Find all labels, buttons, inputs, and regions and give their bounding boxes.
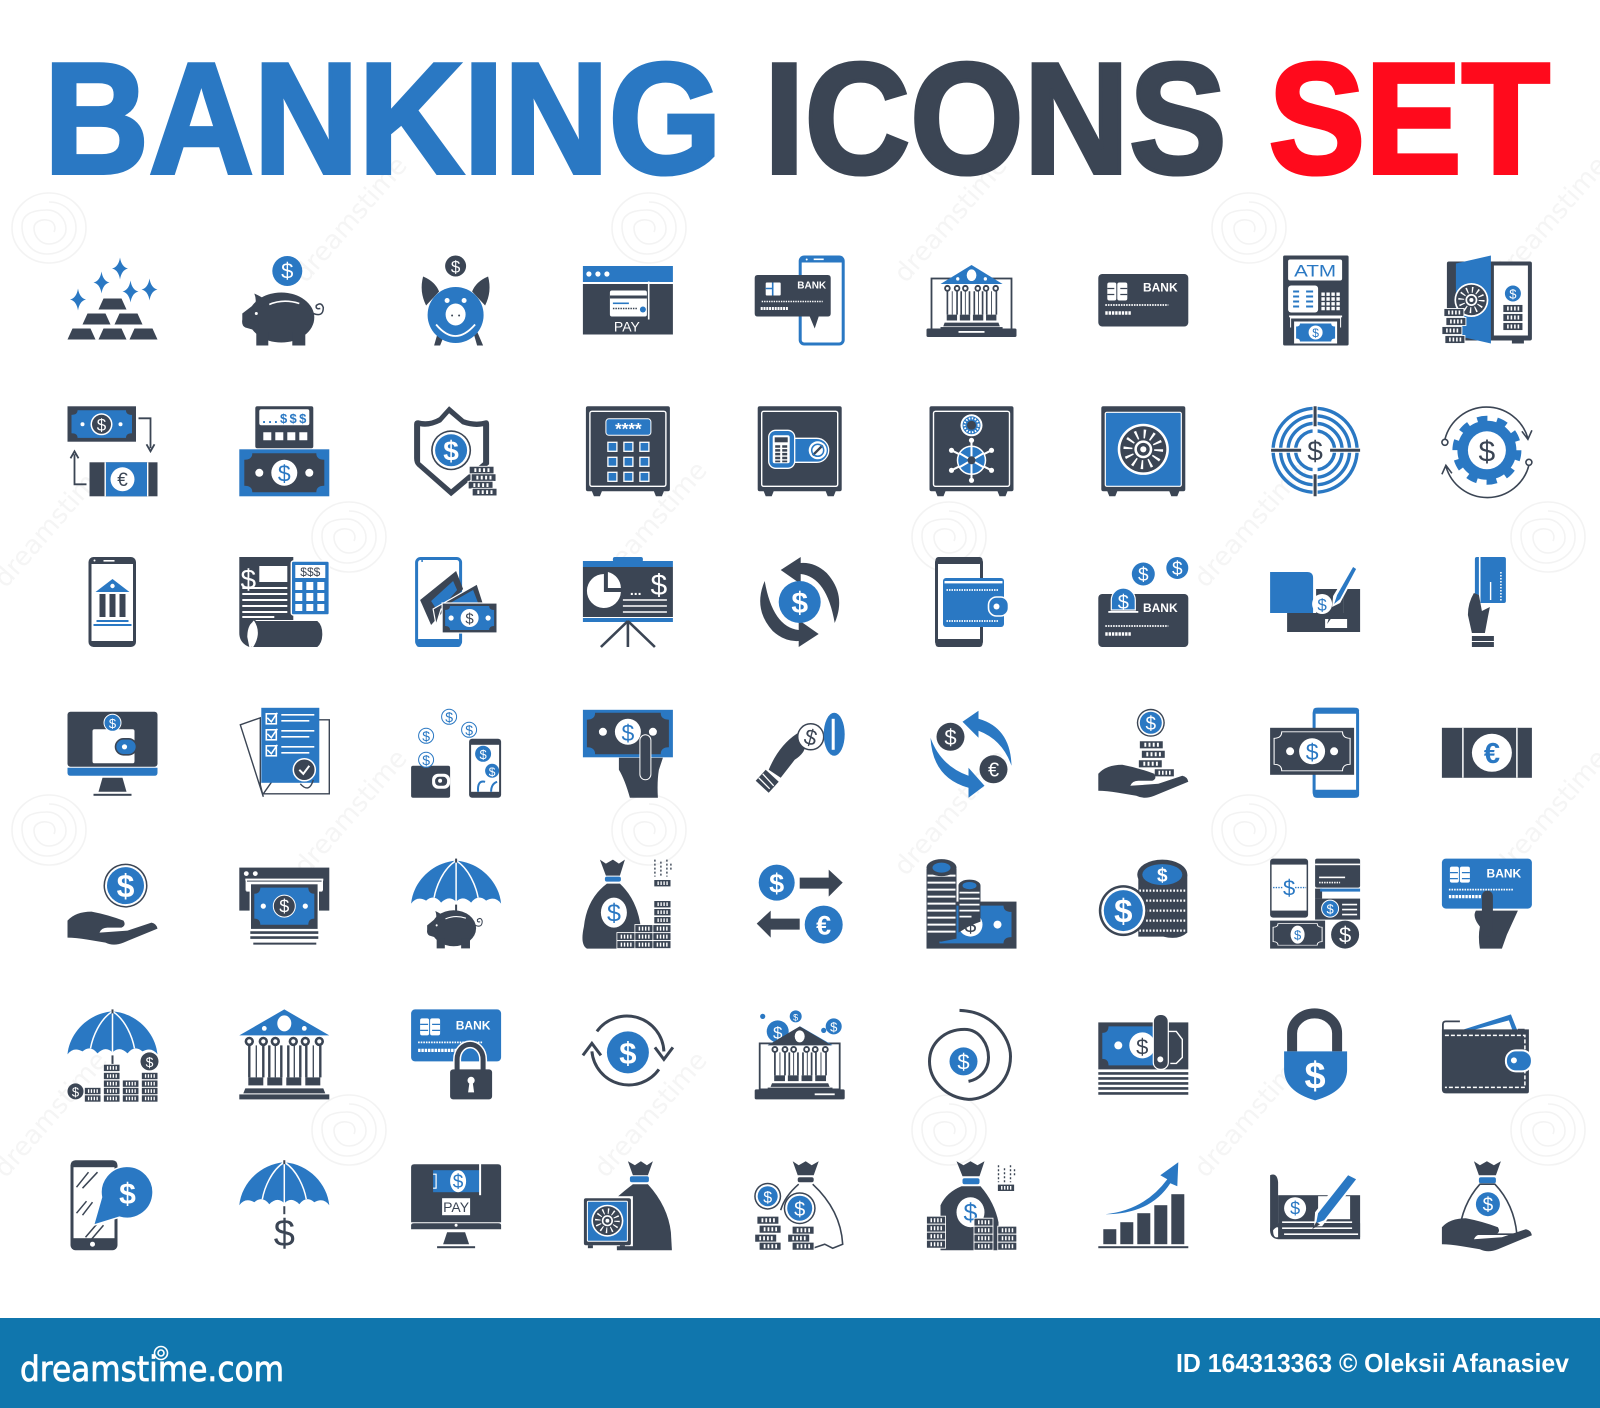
icon: bank chat on phone — [755, 256, 843, 344]
footer logo text: dreamstime.com — [20, 1350, 284, 1390]
icon: big coin and stack — [1099, 860, 1187, 938]
icon: bank card with coins: $ — [1118, 592, 1129, 614]
icon: currency exchange arrows: € — [988, 759, 999, 781]
icon: coin with arrows — [583, 1016, 673, 1085]
icon: coin stacks on banknote — [926, 859, 1016, 949]
icon: spiral coin: $ — [957, 1049, 970, 1074]
icon: presentation board: $ — [651, 569, 668, 602]
icon: money bag with stacks — [582, 860, 671, 949]
icon: bank card with coins: BANK — [1143, 601, 1178, 615]
icon: umbrella dollar: $ — [274, 1213, 295, 1255]
icon: hand inserting coin — [756, 713, 845, 793]
icon: ATM: ATM — [1294, 262, 1336, 280]
icon: wallet, phone and coins: $ — [445, 709, 453, 725]
icon: bank card with finger: BANK — [1487, 867, 1522, 881]
icon: monitor pay — [411, 1163, 501, 1248]
watermark: dreamstime — [288, 744, 414, 882]
icon: money counter — [239, 406, 329, 496]
icon: umbrella over piggy bank — [411, 859, 501, 948]
icon: banknote on phone — [1270, 708, 1359, 798]
icon: cash dispenser — [239, 868, 329, 944]
watermark: dreamstime — [288, 151, 414, 289]
icon: monitor pay: $ — [453, 1172, 464, 1193]
icon: coin with circular arrows: $ — [791, 587, 808, 620]
icon: bank chat on phone: BANK — [797, 280, 827, 292]
icon: mobile, card and cash: $ — [1283, 876, 1295, 901]
title — [44, 31, 1550, 207]
watermark: dreamstime — [1188, 1046, 1314, 1184]
icon: shield with coin: $ — [443, 435, 459, 466]
icon: mobile, card and cash — [1270, 859, 1360, 949]
icon: browser pay: PAY — [614, 318, 641, 334]
icon: bank card: BANK — [1143, 280, 1178, 294]
footer image credit: ID 164313363 © Oleksii Afanasiev — [1176, 1348, 1570, 1378]
icon: phone with banknotes — [416, 558, 497, 647]
icon: blue document, check and pen — [1270, 563, 1360, 632]
icon: hand holding coin stack: $ — [1146, 714, 1157, 735]
icon: money counter: ...$$$ — [262, 411, 307, 426]
icon: safe with keypad — [586, 406, 670, 496]
icon: coins with outlined bag — [754, 1161, 843, 1250]
icon: bank card with padlock — [411, 1009, 501, 1099]
icon: document with calculator: $ — [241, 564, 257, 595]
icon: bank card with coins: $ — [1172, 559, 1183, 580]
icon: banknote on phone: $ — [1306, 739, 1319, 765]
icon: wallet, phone and coins — [411, 709, 501, 798]
icon: dollar euro exchange — [757, 865, 843, 944]
icon: padlock with dollar: $ — [1305, 1055, 1326, 1097]
icon: coin stacks on banknote: $ — [965, 915, 977, 938]
icon: bank on phone — [88, 557, 136, 647]
watermark: dreamstime — [1188, 456, 1314, 594]
title: ICONS — [764, 31, 1227, 207]
watermark: dreamstime — [588, 1046, 714, 1184]
icon: umbrella over coin stacks: $ — [146, 1054, 154, 1070]
icon: wallet, phone and coins: $ — [479, 747, 487, 762]
watermark: dreamstime — [888, 744, 1014, 882]
icon: bank card with padlock: BANK — [456, 1018, 491, 1032]
icon: wallet, phone and coins: $ — [422, 728, 430, 744]
icon: open safe with coins: $ — [1509, 286, 1517, 302]
icon: bank on laptop — [926, 265, 1016, 337]
icon: coins with outlined bag: $ — [794, 1199, 805, 1221]
icon: mobile, card and cash: $ — [1294, 928, 1302, 943]
icon: coin with arrows: $ — [619, 1035, 637, 1070]
footer logo swirl — [154, 1346, 168, 1360]
icon: hand holding banknote: $ — [622, 720, 635, 746]
icon: wallet, phone and coins: $ — [465, 722, 473, 738]
icon: wallet on phone — [936, 557, 1008, 647]
watermark: dreamstime — [588, 456, 714, 594]
icon: piggy bank front: $ — [451, 258, 461, 276]
icon: ATM — [1283, 256, 1349, 346]
icon: padlock with dollar — [1284, 1013, 1347, 1100]
title: SET — [1269, 31, 1550, 207]
icon: wallet — [1442, 1014, 1532, 1093]
icon: big coin and stack: $ — [1114, 893, 1132, 930]
icon: spiral coin — [930, 1010, 1010, 1099]
icon: hand with coin — [68, 864, 158, 945]
icon: hand holding banknote — [583, 710, 673, 798]
icon: banknote stack: $ — [1136, 1034, 1148, 1059]
icon: money exchange: € — [117, 470, 128, 491]
icon: check with pen: $ — [1290, 1199, 1300, 1219]
icon: bank card with coins — [1098, 557, 1188, 647]
icon: banknote stack — [1098, 1014, 1188, 1093]
icon: currency exchange arrows: $ — [944, 725, 957, 750]
icon: phone with banknotes: $ — [465, 610, 474, 628]
icon: shield with coin — [414, 406, 497, 496]
icon: safe and money bag — [583, 1161, 672, 1250]
title: BANKING — [44, 31, 722, 207]
icon: mobile, card and cash: $ — [1339, 923, 1351, 948]
icon: umbrella dollar — [239, 1160, 329, 1255]
icon: checklist documents — [240, 708, 329, 797]
icon: monitor pay: PAY — [443, 1199, 470, 1215]
icon: money bag with stacks: $ — [607, 900, 621, 928]
icon: mobile, card and cash: $ — [1326, 902, 1334, 917]
icon: coins with outlined bag: $ — [763, 1190, 772, 1207]
icon: money bag with coin stacks: $ — [964, 1199, 978, 1227]
icon: piggy bank with coin — [242, 256, 323, 346]
icon: hand inserting coin: $ — [801, 724, 820, 751]
icon: bank building — [239, 1009, 329, 1099]
icon: hand holding card — [1468, 557, 1506, 647]
icon: phone with dollar bubble: $ — [119, 1178, 136, 1211]
icon: laptop bank and coins: $ — [793, 1012, 798, 1022]
icon: safe with ship wheel — [930, 406, 1014, 496]
icon: wallet on monitor: $ — [109, 716, 117, 731]
icon: euro banknote — [1442, 728, 1532, 778]
icon: umbrella over coin stacks — [68, 1009, 158, 1102]
icon: blue safe with dial — [1101, 406, 1185, 496]
icon: bank card — [1098, 274, 1188, 326]
watermark: dreamstime — [888, 151, 1014, 289]
icon: dollar euro exchange: € — [816, 911, 831, 941]
icon: presentation board — [583, 557, 673, 647]
icon: document with calculator — [239, 557, 329, 647]
footer banner — [0, 1318, 1600, 1408]
icon: hand holding money bag: $ — [1483, 1195, 1494, 1216]
icon: euro banknote: € — [1484, 738, 1500, 770]
icon: target with dollar: $ — [1307, 435, 1323, 466]
icon: target with dollar — [1270, 406, 1360, 496]
icon: money exchange — [68, 406, 158, 496]
icon: wallet on monitor — [68, 712, 158, 796]
watermark — [0, 151, 1600, 1184]
icon: cash dispenser: $ — [279, 897, 289, 917]
icon: umbrella over coin stacks: $ — [72, 1084, 80, 1099]
icon: phone with dollar bubble — [70, 1160, 153, 1250]
icon: hand holding money bag — [1442, 1161, 1532, 1251]
icon: laptop bank and coins: $ — [830, 1019, 838, 1034]
icon: wallet, phone and coins: $ — [489, 765, 496, 779]
icon: dollar euro exchange: $ — [769, 869, 784, 899]
icon: hand with coin: $ — [117, 868, 135, 904]
icon: coin with circular arrows — [760, 557, 839, 647]
icon: gear with dollar: $ — [1479, 435, 1496, 468]
icon: check with pen — [1270, 1171, 1360, 1239]
icon: growth chart — [1098, 1162, 1188, 1248]
icon: presentation board: ... — [630, 582, 642, 598]
icon: money counter: $ — [278, 460, 291, 486]
icon: piggy bank with coin: $ — [281, 258, 293, 284]
icon: money exchange: $ — [97, 415, 107, 434]
icon: open safe with coins — [1442, 256, 1532, 344]
icon: gold bars — [68, 258, 158, 340]
icon: safe with keypad: **** — [615, 419, 642, 438]
icon: bank card with coins: $ — [1138, 565, 1149, 586]
icon: big coin and stack: $ — [1157, 866, 1168, 887]
icon: laptop bank and coins — [755, 1010, 845, 1099]
icon: ATM: $ — [1312, 326, 1319, 340]
icon: bank card with finger — [1442, 859, 1532, 949]
icon: currency exchange arrows — [930, 711, 1012, 798]
icon: laptop bank and coins: $ — [773, 1023, 783, 1042]
icon: gear with dollar — [1442, 407, 1532, 498]
icon: wallet, phone and coins: $ — [422, 752, 430, 768]
icon: browser pay — [583, 266, 673, 334]
icon: document with calculator: $$$ — [300, 565, 321, 579]
icon: safe with calculator lock — [758, 406, 842, 496]
icon: hand holding coin stack — [1098, 709, 1188, 798]
icon: money bag with coin stacks — [926, 1161, 1017, 1250]
icon: piggy bank front — [422, 256, 490, 346]
icon: blue document, check and pen: $ — [1317, 596, 1327, 614]
